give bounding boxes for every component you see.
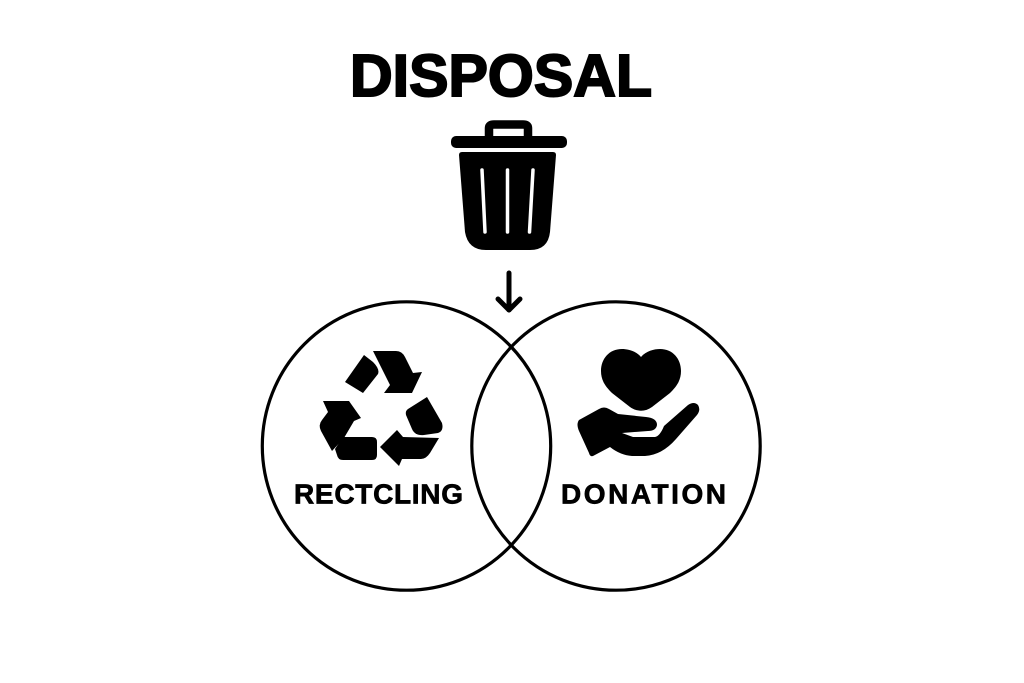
icon: trash can [451,124,567,250]
arrow: down [498,273,520,310]
circle: donation [472,302,760,590]
icon: heart in hand [578,349,699,456]
title: DISPOSAL [350,43,652,109]
label: donation: DONATION [561,478,726,510]
icon: recycling symbol [320,351,442,466]
label: recycling: RECTCLING [294,478,463,510]
circle: recycling [262,302,551,590]
